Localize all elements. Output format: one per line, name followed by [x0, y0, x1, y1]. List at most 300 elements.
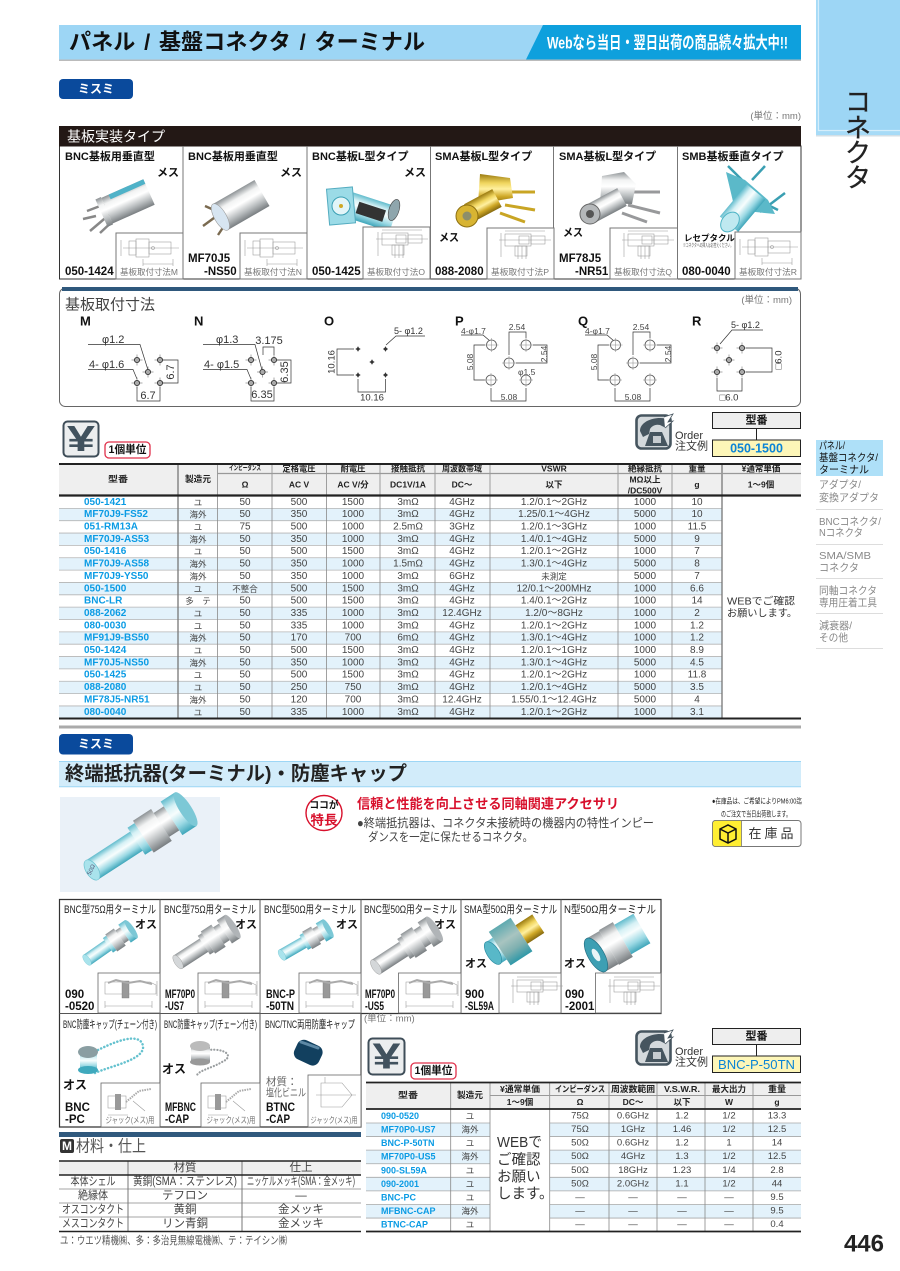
table rows: 1.2/0～8GHz — [525, 608, 583, 619]
table rows: 080-0040 — [84, 707, 127, 718]
product: 088-2080: SMA基板L型タイプ — [435, 149, 532, 163]
table rows: 5000 — [634, 559, 657, 570]
diagram R: □6.0 — [774, 351, 784, 369]
table rows: ユ — [194, 584, 202, 594]
diagram M: M — [80, 314, 91, 328]
product: 900-SL59A: オス — [465, 957, 487, 970]
product: MFBNC-CAP: オス — [162, 1062, 186, 1076]
table rows: 2 — [694, 608, 700, 619]
product: 900-SL59A: -SL59A — [465, 1001, 494, 1013]
table rows: 4GHz — [449, 707, 475, 718]
table rows: 120 — [291, 694, 308, 705]
table rows: 1000 — [634, 596, 657, 607]
table rows: 1500 — [342, 497, 365, 508]
feature description — [357, 815, 654, 844]
materials heading: 材料・仕上 — [76, 1138, 146, 1156]
table header: 絶縁抵抗 — [628, 464, 662, 474]
price note — [497, 1135, 554, 1202]
table rows: 500 — [291, 596, 308, 607]
diagram P — [455, 314, 549, 402]
table rows: 4GHz — [449, 657, 475, 668]
table header: DC～ — [623, 1097, 644, 1107]
sidebar navigation: パネル/ — [819, 440, 845, 452]
table rows: 1000 — [634, 620, 657, 631]
table rows: ― — [628, 1192, 638, 1203]
order example: 型番 — [746, 1030, 768, 1042]
sidebar navigation: 変換アダプタ — [819, 491, 879, 504]
table rows: 1.25/0.1～4GHz — [518, 509, 590, 520]
table rows: 13.3 — [768, 1110, 786, 1122]
sidebar navigation: 同軸コネクタ — [819, 584, 877, 597]
table header: /DC500V — [628, 486, 663, 496]
specifications table — [59, 463, 801, 728]
table rows: 1.4/0.1～2GHz — [521, 596, 587, 607]
price note — [727, 594, 797, 620]
manufacturer footnote: ユ：ウエツ精機㈱、多：多治見無線電機㈱、テ：テイシン㈱ — [60, 1233, 287, 1247]
table rows: 海外 — [461, 1206, 479, 1216]
table rows: ユ — [194, 621, 202, 631]
table rows: 335 — [291, 620, 308, 631]
table rows: 10 — [691, 509, 703, 520]
table rows: BNC-LR — [84, 596, 123, 607]
product: BNC-PC: BNC — [65, 1102, 90, 1114]
table rows: ユ — [466, 1165, 474, 1175]
table rows: ユ — [466, 1111, 474, 1121]
table rows: 0.6GHz — [617, 1138, 649, 1149]
table rows: 1000 — [634, 670, 657, 681]
product: BTNC-CAP: -CAP — [266, 1114, 290, 1126]
product: MF70P0-US7: MF70P0 — [165, 989, 195, 1001]
table rows: 海外 — [189, 658, 207, 668]
table rows: 1000 — [634, 633, 657, 644]
table rows: 1.46 — [673, 1124, 691, 1135]
table rows: 75 — [239, 522, 251, 532]
table rows: 50 — [239, 596, 251, 607]
product: MF70P0-US7: オス — [235, 918, 257, 931]
table rows: 50 — [239, 546, 251, 557]
table rows: 350 — [291, 509, 308, 520]
table rows: 1/2 — [722, 1151, 736, 1162]
table rows: 1.55/0.1～12.4GHz — [511, 694, 597, 705]
table header: VSWR — [541, 464, 567, 474]
icon: order telephone — [636, 414, 673, 448]
product: 050-1425 — [312, 149, 430, 279]
feature heading: 信頼と性能を向上させる同軸関連アクセサリ — [357, 796, 619, 812]
table rows: 不整合 — [232, 584, 258, 594]
product: MFBNC-CAP: BNC防塵キャップ(チェーン付き) — [164, 1017, 257, 1031]
product: MF70P0-US5 — [364, 902, 461, 1013]
product: 050-1425: 050-1425 — [312, 266, 361, 278]
product: 090-0520: BNC型75Ω用ターミナル — [64, 902, 156, 916]
product: MFBNC-CAP: ジャック(メス)用 — [206, 1115, 256, 1125]
order example label: 注文例 — [675, 1054, 708, 1068]
diagram Q: 2.54 — [663, 345, 673, 362]
table rows: 7 — [694, 546, 700, 557]
diagram O — [324, 314, 425, 404]
table rows: 1000 — [342, 608, 365, 619]
diagram M — [80, 314, 178, 402]
diagram M: 6.7 — [140, 390, 156, 402]
table rows: 500 — [291, 497, 308, 508]
panel heading — [59, 126, 801, 146]
table rows: ― — [724, 1192, 734, 1203]
product: 090-0520: -0520 — [65, 1001, 94, 1013]
diagram R: R — [692, 314, 702, 328]
table rows: ユ — [194, 497, 202, 507]
table rows: 1.2/0.1～2GHz — [521, 620, 587, 631]
diagram N: 6.35 — [251, 389, 273, 401]
product: MF70J5-NS50: 基板取付寸法N — [244, 267, 302, 277]
table rows: MF70J9-YS50 — [84, 571, 149, 582]
table header: 製造元 — [185, 474, 211, 484]
table header: W — [725, 1097, 734, 1107]
table rows: 4GHz — [449, 670, 475, 681]
table rows: 1500 — [342, 596, 365, 607]
table rows: 4GHz — [449, 620, 475, 631]
diagram Q: 2.54 — [633, 322, 650, 332]
table rows: ― — [575, 1219, 585, 1230]
icon: materials M: M — [62, 1139, 72, 1153]
table header: 周波数帯域 — [442, 464, 482, 474]
stock note — [712, 796, 802, 818]
table header: インピーダンス — [555, 1084, 605, 1094]
feature description: ダンスを一定に保たせるコネクタ。 — [368, 829, 533, 844]
diagram Q: Q — [578, 314, 588, 328]
diagram Q: 4-φ1.7 — [585, 326, 610, 336]
table rows: 050-1421 — [84, 497, 127, 508]
table rows: 4GHz — [449, 583, 475, 594]
table rows: 3.1 — [690, 707, 704, 718]
table rows: ユ — [194, 670, 202, 680]
product: MF70P0-US5: -US5 — [365, 1001, 384, 1013]
table rows: 1000 — [634, 546, 657, 557]
table rows: 1500 — [342, 645, 365, 656]
product: 080-0040: ※コネクタへの挿入はお控えください。 — [683, 242, 733, 249]
table header: Ω — [242, 480, 249, 490]
table rows — [84, 497, 707, 718]
price note: ご確認 — [497, 1152, 541, 1168]
table rows: 9.5 — [770, 1192, 784, 1203]
table rows: 多 テ — [185, 596, 211, 606]
table rows: 海外 — [189, 534, 207, 544]
table rows: 3.5 — [690, 682, 704, 693]
table rows: 250 — [291, 682, 308, 693]
table rows: 1500 — [342, 546, 365, 557]
diagram P: 4-φ1.7 — [461, 326, 486, 336]
panel heading: 基板実装タイプ — [67, 128, 165, 144]
table rows: ― — [575, 1206, 585, 1216]
price note: お願い — [497, 1168, 540, 1186]
table rows: 10 — [691, 497, 703, 508]
materials table: オスコンタクト — [62, 1203, 124, 1216]
table rows: 12/0.1～200MHz — [516, 583, 592, 594]
table rows: 1.3/0.1～4GHz — [521, 657, 587, 668]
table header: 型番 — [108, 474, 129, 484]
table rows: 088-2080 — [84, 682, 127, 693]
table rows: 1000 — [342, 571, 365, 582]
sidebar navigation: SMA/SMB — [819, 550, 871, 562]
table rows: 50 — [239, 608, 251, 619]
table rows: 1.3 — [675, 1151, 689, 1162]
product: 050-1424: BNC基板用垂直型 — [65, 149, 155, 163]
table rows: ― — [628, 1219, 638, 1230]
table rows: 335 — [291, 707, 308, 718]
diagram M: φ1.2 — [102, 334, 124, 346]
table rows: 50 — [239, 633, 251, 644]
feature badge: ココが — [310, 798, 338, 812]
product: MFBNC-CAP: -CAP — [165, 1114, 189, 1126]
order example label: Order — [675, 1046, 703, 1058]
icon: yen price: ¥ — [67, 418, 95, 459]
table rows: 海外 — [461, 1152, 479, 1162]
web promotion text: Webなら当日・翌日出荷の商品続々拡大中!! — [547, 32, 788, 52]
table header: ¥通常単価 — [500, 1084, 541, 1094]
table rows: 3mΩ — [397, 682, 419, 693]
table rows: 700 — [345, 633, 362, 644]
unit note: (単位：mm) — [741, 294, 792, 306]
diagram N: N — [194, 314, 203, 328]
table rows: 海外 — [189, 559, 207, 569]
table rows: 088-2062 — [84, 608, 127, 619]
sidebar navigation: アダプタ/ — [819, 478, 861, 491]
table header: ¥通常単価 — [742, 464, 781, 474]
table rows: 1000 — [634, 608, 657, 619]
panel: mounting dimensions — [59, 287, 801, 407]
table rows: 12.5 — [768, 1151, 786, 1162]
product: MF70P0-US7: BNC型75Ω用ターミナル — [164, 902, 256, 916]
order example — [712, 1028, 800, 1072]
table rows: 335 — [291, 608, 308, 619]
table header: g — [694, 480, 700, 490]
product: MF78J5-NR51: MF78J5 — [559, 253, 602, 265]
product: 088-2080: 基板取付寸法P — [491, 267, 549, 277]
table rows: 1000 — [634, 645, 657, 656]
table rows: 海外 — [189, 571, 207, 581]
table rows: ― — [575, 1192, 585, 1203]
table rows: 1000 — [342, 559, 365, 570]
table rows: 4GHz — [449, 509, 475, 520]
sidebar navigation: 減衰器/ — [819, 619, 852, 632]
diagram M: 4- φ1.6 — [89, 359, 124, 371]
section title: 終端抵抗器(ターミナル)・防塵キャップ — [65, 762, 407, 785]
diagram Q — [578, 314, 673, 402]
diagram P: 5.08 — [465, 353, 475, 370]
table rows: ― — [628, 1206, 638, 1216]
table rows: 1000 — [342, 707, 365, 718]
diagram P: 2.54 — [539, 345, 549, 362]
product: 050-1425: BNC基板L型タイプ — [312, 149, 409, 163]
table rows: 3mΩ — [397, 608, 419, 619]
product: MF70P0-US5: MF70P0 — [365, 989, 395, 1001]
table rows: 1.4/0.1～4GHz — [521, 534, 587, 545]
table rows: 350 — [291, 559, 308, 570]
product: MF70J5-NS50 — [188, 149, 307, 279]
materials table: リン青銅 — [162, 1216, 208, 1230]
table header — [59, 463, 801, 496]
table rows: 1500 — [342, 670, 365, 681]
sidebar navigation — [816, 440, 883, 648]
table rows: ユ — [194, 707, 202, 717]
diagram Q: 5.08 — [625, 392, 642, 402]
order example label: 注文例 — [675, 438, 708, 452]
table rows: 500 — [291, 670, 308, 681]
table rows: BNC-P-50TN — [381, 1138, 435, 1148]
product: BTNC-CAP: ジャック(メス)用 — [310, 1115, 358, 1125]
table header: 接触抵抗 — [391, 464, 425, 474]
table rows: 3mΩ — [397, 694, 419, 705]
table rows: 050-1500 — [84, 583, 127, 594]
table rows: 11.8 — [688, 670, 707, 681]
table rows: 050-1416 — [84, 546, 127, 557]
table rows: 5000 — [634, 657, 657, 668]
product: MF70P0-US5: オス — [434, 918, 456, 931]
table rows: 50 — [239, 620, 251, 631]
diagram P: φ1.5 — [518, 367, 536, 377]
icon: yen price: ¥ — [372, 1036, 400, 1076]
table rows: ユ — [466, 1179, 474, 1189]
table rows: 6.6 — [690, 583, 704, 594]
product: 088-2080: メス — [439, 232, 459, 244]
table rows: 3mΩ — [397, 497, 419, 508]
unit note: (単位：mm) — [750, 110, 801, 122]
panel: terminal products — [60, 900, 661, 1127]
table rows: 50 — [239, 670, 251, 681]
product: 050-1425: メス — [404, 167, 426, 179]
table rows: MF70P0-US7 — [381, 1125, 436, 1135]
product: 050-1425: 基板取付寸法O — [367, 267, 425, 277]
diagram M: 6.7 — [165, 364, 177, 380]
table rows: ユ — [466, 1220, 474, 1230]
unit note: (単位：mm) — [364, 1012, 415, 1024]
table header: 製造元 — [457, 1090, 483, 1100]
order example label — [675, 430, 708, 452]
price note: します。 — [497, 1186, 554, 1202]
product: BNC-P-50TN: BNC型50Ω用ターミナル — [264, 902, 356, 916]
feature badge — [306, 796, 342, 830]
table rows: 4.5 — [690, 657, 704, 668]
product: MF78J5-NR51: 基板取付寸法Q — [614, 267, 672, 277]
product: 050-1424 — [65, 149, 183, 279]
product: 088-2080: 088-2080 — [435, 266, 484, 278]
diagram R: □6.0 — [720, 392, 738, 404]
table rows: ― — [724, 1206, 734, 1216]
product: BTNC-CAP: BTNC — [266, 1102, 295, 1114]
table rows: 4GHz — [449, 546, 475, 557]
brand badge: misumi: ミスミ — [78, 737, 114, 751]
table rows: 50Ω — [571, 1178, 589, 1189]
table rows: 1.2/0.1～2GHz — [521, 670, 587, 681]
diagram Q: 5.08 — [589, 353, 599, 370]
table header: 1～9個 — [748, 480, 774, 490]
materials table: 黄銅(SMA：ステンレス) — [133, 1174, 237, 1188]
table rows: MF78J5-NR51 — [84, 694, 150, 705]
product: 050-1424: 050-1424 — [65, 266, 114, 278]
table rows: 500 — [291, 645, 308, 656]
product: 090-0520 — [64, 902, 160, 1013]
table rows: BTNC-CAP — [381, 1220, 428, 1230]
sidebar navigation: 基盤コネクタ/ — [819, 451, 878, 464]
table rows: 3mΩ — [397, 509, 419, 520]
table rows: ― — [677, 1206, 687, 1216]
table rows: 50 — [239, 694, 251, 705]
materials table: 金メッキ — [278, 1217, 324, 1230]
table rows: ― — [677, 1219, 687, 1230]
product: BNC-P-50TN: BNC-P — [266, 989, 295, 1001]
table header: 以下 — [545, 480, 563, 490]
product: BNC-PC: オス — [63, 1078, 87, 1092]
product: 090-2001: オス — [564, 957, 586, 970]
table rows: 2.5mΩ — [393, 522, 423, 532]
table rows: ユ — [466, 1138, 474, 1148]
table rows: 50 — [239, 571, 251, 582]
product: 900-SL59A: SMA型50Ω用ターミナル — [464, 902, 557, 916]
table rows: 050-1424 — [84, 645, 127, 656]
order example: BNC-P-50TN — [718, 1057, 795, 1072]
product: MFBNC-CAP — [162, 1017, 260, 1127]
product: MF70P0-US5: BNC型50Ω用ターミナル — [364, 902, 457, 916]
diagram P: 5.08 — [501, 392, 518, 402]
table rows: 6mΩ — [397, 633, 419, 644]
order example — [712, 412, 800, 456]
table rows: MF70P0-US5 — [381, 1152, 436, 1162]
product: 090-0520: 090 — [65, 989, 84, 1001]
table rows: 4GHz — [449, 559, 475, 570]
diagram O: 10.16 — [360, 392, 384, 404]
table rows: 1000 — [342, 620, 365, 631]
table rows: 3mΩ — [397, 670, 419, 681]
table rows: 1000 — [342, 534, 365, 545]
diagram O: O — [324, 314, 334, 328]
table rows: 12.4GHz — [442, 694, 482, 705]
order example label — [675, 1046, 708, 1068]
table rows: 0.6GHz — [617, 1110, 649, 1122]
table header: Ω — [577, 1097, 584, 1107]
icon: order telephone — [636, 1030, 673, 1064]
table rows: 1.2/0.1～2GHz — [521, 707, 587, 718]
table rows: 3mΩ — [397, 546, 419, 557]
table rows: 5000 — [634, 694, 657, 705]
table rows: 7 — [694, 571, 700, 582]
diagram R — [692, 314, 784, 404]
table rows: 170 — [291, 633, 308, 644]
table rows: 50 — [239, 497, 251, 508]
table rows: 9 — [694, 534, 700, 545]
table header — [366, 1082, 801, 1109]
materials table: 金メッキ — [278, 1203, 324, 1216]
table rows: ― — [677, 1192, 687, 1203]
product: 080-0040: SMB基板垂直タイプ — [682, 149, 783, 163]
table header: 重量 — [768, 1084, 787, 1094]
table header: V.S.W.R. — [664, 1084, 700, 1094]
diagram R: 5- φ1.2 — [731, 320, 760, 330]
table header: 定格電圧 — [282, 464, 316, 474]
table rows: 2.8 — [770, 1165, 784, 1176]
price note: WEBでご確認 — [727, 594, 795, 608]
product: 080-0040: 基板取付寸法R — [739, 267, 797, 277]
brand badge: misumi: ミスミ — [78, 82, 114, 96]
table rows: 14 — [772, 1138, 782, 1149]
diagram N — [194, 314, 291, 401]
product: 090-2001: -2001 — [565, 1001, 595, 1013]
product: 088-2080 — [435, 149, 554, 279]
table rows: 1.3/0.1～4GHz — [521, 633, 587, 644]
product: 090-2001: N型50Ω用ターミナル — [564, 902, 656, 916]
table rows: 4GHz — [621, 1151, 645, 1162]
materials table: 黄銅 — [174, 1202, 196, 1216]
terminal specifications table — [366, 1082, 801, 1232]
table rows: 051-RM13A — [84, 522, 138, 532]
icon: yen price — [368, 1036, 404, 1076]
